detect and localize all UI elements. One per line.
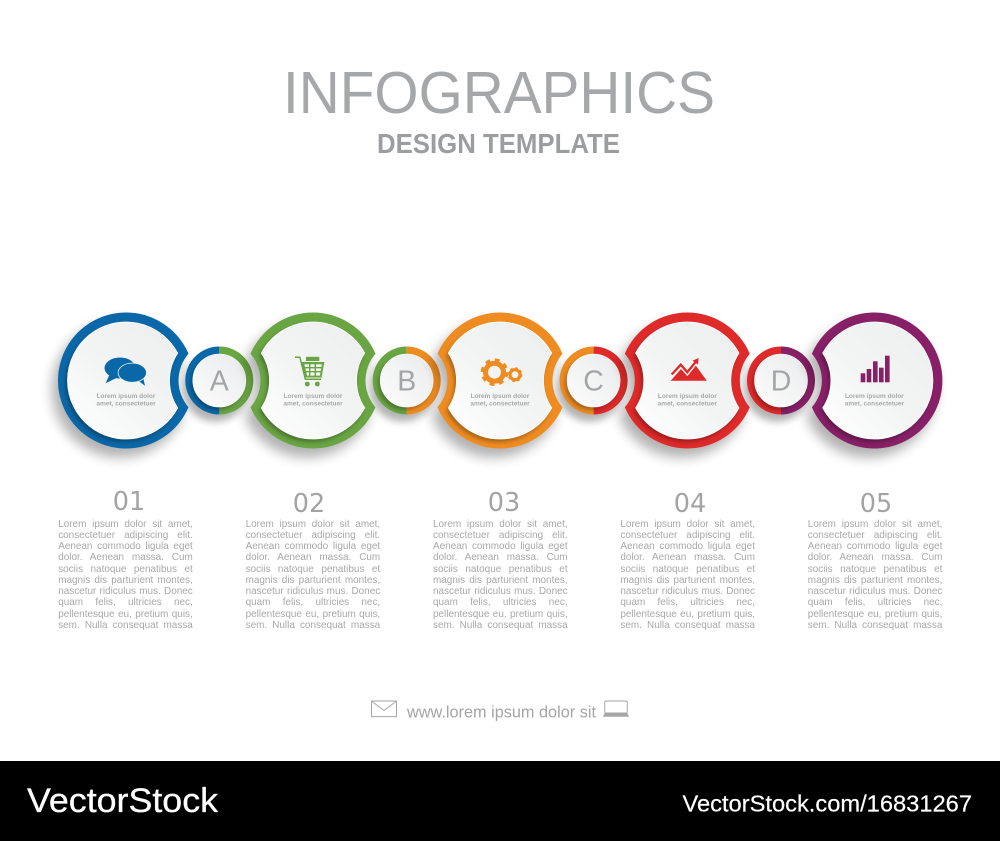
text column 04: nascetur ridiculus mus. Donec (620, 586, 755, 597)
icon caption: amet, consectetuer (470, 400, 530, 407)
text column 04: Aenean commodo ligula eget (620, 541, 755, 552)
icon caption: amet, consectetuer (845, 400, 904, 407)
text column 01: Lorem ipsum dolor sit amet, (58, 518, 193, 530)
icon caption: Lorem ipsum dolor (284, 393, 343, 400)
badge C (557, 346, 628, 422)
text column 03: sem. Nulla consequat massa (433, 620, 568, 631)
text column 05: pellentesque eu, pretium quis, (808, 608, 942, 620)
text column 05: consectetuer adipiscing elit. (808, 530, 942, 541)
step 04 circle (619, 313, 750, 457)
step 02 circle (245, 313, 375, 457)
text column 01 (58, 518, 193, 631)
text column 03: nascetur ridiculus mus. Donec (433, 586, 568, 597)
text column 04: magnis dis parturient montes, (620, 575, 755, 586)
text column 01: dolor. Aenean massa. Cum (58, 552, 193, 563)
text column 05: sociis natoque penatibus et (808, 564, 942, 574)
text column 03: quam felis, ultricies nec, (433, 597, 568, 608)
icon: laptop (603, 701, 629, 717)
number 03: 03 (488, 488, 520, 518)
subtitle: DESIGN TEMPLATE (377, 128, 620, 159)
text column 01: magnis dis parturient montes, (58, 575, 193, 586)
text column 01: pellentesque eu, pretium quis, (58, 608, 193, 620)
icon caption: Lorem ipsum dolor (658, 393, 717, 400)
text column 02: Aenean commodo ligula eget (246, 541, 380, 552)
step 03 circle (432, 313, 562, 457)
badge D: D (771, 366, 791, 398)
title: INFOGRAPHICS (283, 60, 715, 126)
icon: envelope (372, 701, 396, 717)
watermark band (0, 761, 1000, 841)
footer url: www.lorem ipsum dolor sit (406, 704, 596, 722)
number 02: 02 (293, 489, 325, 519)
text column 01: Aenean commodo ligula eget (58, 541, 193, 552)
text column 04: Lorem ipsum dolor sit amet, (620, 518, 755, 530)
text column 03: dolor. Aenean massa. Cum (433, 552, 568, 563)
number 01: 01 (113, 487, 145, 517)
text column 03: pellentesque eu, pretium quis, (433, 608, 568, 620)
badge D (744, 346, 815, 422)
text column 04: quam felis, ultricies nec, (620, 597, 755, 608)
icon: gears (482, 360, 522, 385)
text column 04: pellentesque eu, pretium quis, (620, 608, 755, 620)
text column 04: consectetuer adipiscing elit. (620, 530, 755, 541)
badge A (182, 346, 253, 422)
text column 05: quam felis, ultricies nec, (808, 597, 942, 608)
text column 02: quam felis, ultricies nec, (246, 597, 380, 608)
icon: bar chart (861, 356, 890, 382)
text column 05: dolor. Aenean massa. Cum (808, 552, 942, 563)
text column 01: sem. Nulla consequat massa (58, 620, 193, 631)
step 01 circle (52, 312, 188, 458)
text column 02: nascetur ridiculus mus. Donec (246, 586, 380, 597)
text column 03: Lorem ipsum dolor sit amet, (433, 518, 568, 530)
text column 03: consectetuer adipiscing elit. (433, 530, 568, 541)
text column 01: sociis natoque penatibus et (58, 564, 193, 574)
text column 02: Lorem ipsum dolor sit amet, (246, 518, 380, 530)
badge B: B (397, 366, 416, 398)
text column 02: pellentesque eu, pretium quis, (246, 608, 380, 620)
icon caption: amet, consectetuer (96, 400, 156, 407)
text column 02: sem. Nulla consequat massa (246, 620, 380, 631)
text column 05: Lorem ipsum dolor sit amet, (808, 518, 942, 530)
step 05 circle (806, 312, 942, 458)
icon caption: amet, consectetuer (283, 400, 343, 407)
icon: mountain trend (671, 358, 707, 381)
text column 01: consectetuer adipiscing elit. (58, 530, 193, 541)
text column 02: sociis natoque penatibus et (246, 564, 380, 574)
text column 05: sem. Nulla consequat massa (808, 620, 942, 631)
text column 02: consectetuer adipiscing elit. (246, 530, 380, 541)
text column 04 (620, 518, 755, 631)
badge A: A (210, 366, 229, 398)
text column 04: sem. Nulla consequat massa (620, 620, 755, 631)
text column 05: magnis dis parturient montes, (808, 575, 942, 586)
text column 02: dolor. Aenean massa. Cum (246, 552, 380, 563)
brand logo text: VectorStock (27, 782, 219, 820)
badge B (370, 346, 441, 422)
text column 04: dolor. Aenean massa. Cum (620, 552, 755, 563)
text column 03 (433, 518, 568, 631)
icon caption: Lorem ipsum dolor (97, 393, 156, 400)
text column 05: Aenean commodo ligula eget (808, 541, 942, 552)
text column 05: nascetur ridiculus mus. Donec (808, 586, 942, 597)
text column 01: nascetur ridiculus mus. Donec (58, 586, 193, 597)
text column 01: quam felis, ultricies nec, (58, 597, 193, 608)
text column 03: sociis natoque penatibus et (433, 564, 568, 574)
number 05: 05 (860, 489, 892, 519)
text column 02: magnis dis parturient montes, (246, 575, 380, 586)
text column 05 (808, 518, 942, 631)
badge C: C (583, 366, 604, 398)
text column 04: sociis natoque penatibus et (620, 564, 755, 574)
text column 02 (246, 518, 380, 631)
icon caption: amet, consectetuer (658, 400, 717, 407)
text column 03: magnis dis parturient montes, (433, 575, 568, 586)
icon: shopping cart (295, 356, 324, 386)
icon: speech bubbles (104, 358, 146, 386)
icon caption: Lorem ipsum dolor (845, 393, 904, 400)
image url text: VectorStock.com/16831267 (682, 791, 972, 817)
text column 03: Aenean commodo ligula eget (433, 541, 568, 552)
icon caption: Lorem ipsum dolor (471, 393, 530, 400)
number 04: 04 (674, 489, 706, 519)
